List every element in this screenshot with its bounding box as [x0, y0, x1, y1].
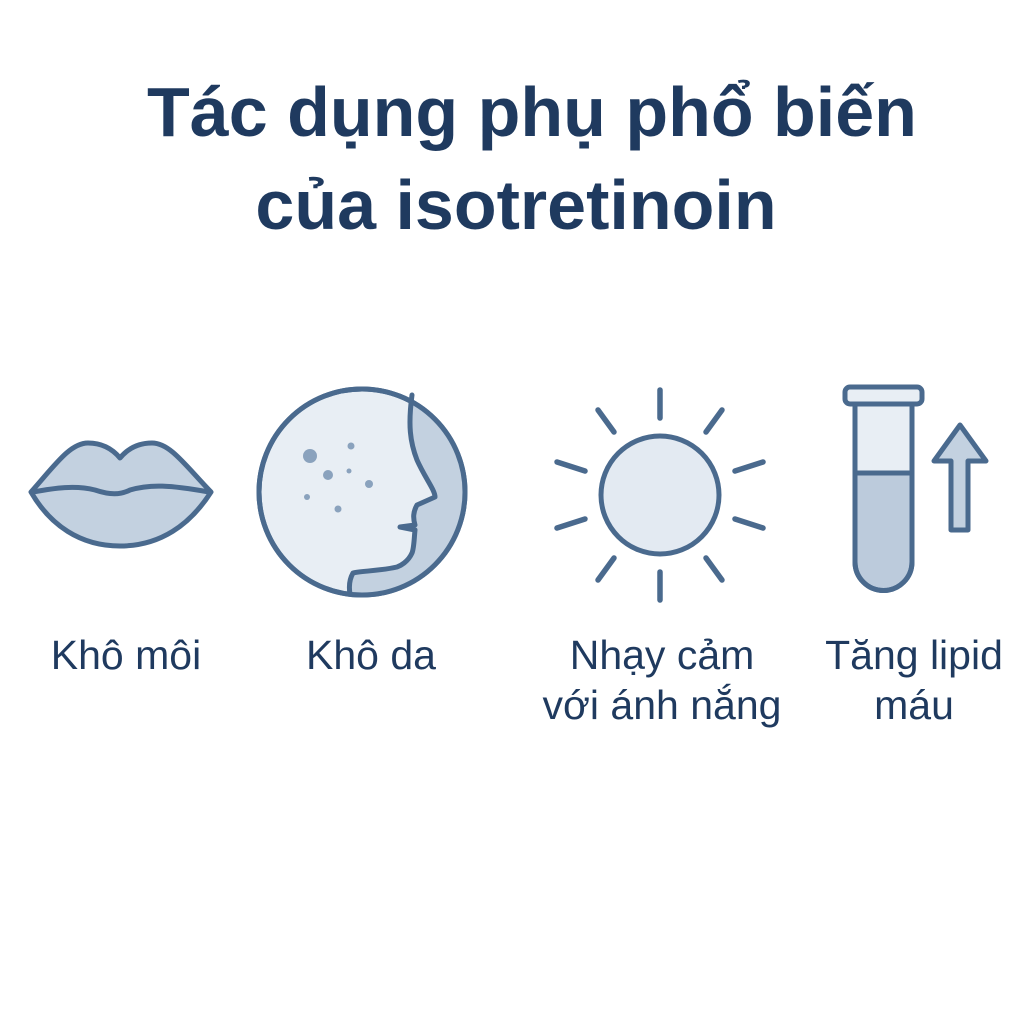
icon: sun — [557, 390, 763, 600]
title: Tác dụng phụ phổ biến — [147, 73, 917, 151]
icon: lips — [31, 443, 211, 546]
label: lipid: máu — [874, 682, 954, 728]
label: dry skin: Khô da — [306, 632, 436, 678]
title: của isotretinoin — [255, 166, 777, 244]
label: photosensitivity: Nhạy cảm — [570, 632, 754, 678]
icon: face — [259, 389, 465, 595]
icon: test tube with arrow — [845, 387, 986, 590]
label: lipid — [825, 632, 1003, 728]
label: photosensitivity: với ánh nắng — [543, 682, 781, 728]
label: lipid: Tăng lipid — [825, 632, 1003, 678]
title — [147, 73, 917, 244]
label: dry lips: Khô môi — [51, 632, 201, 678]
label: photosensitivity — [542, 632, 781, 728]
